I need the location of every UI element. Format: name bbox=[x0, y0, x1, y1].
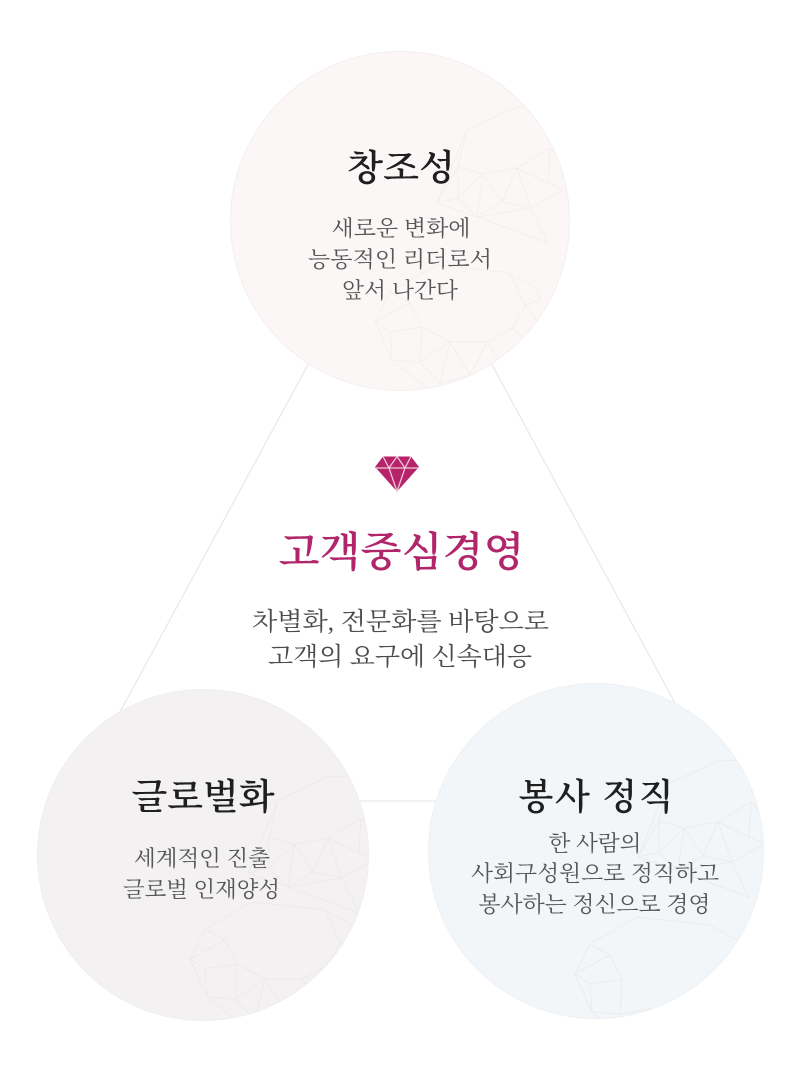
text block: central description: 차별화, 전문화를 바탕으로 bbox=[252, 608, 549, 636]
text block: globalization description: 세계적인 진출 bbox=[134, 846, 270, 871]
text block: central description bbox=[252, 608, 549, 671]
text block: creativity description: 앞서 나간다 bbox=[342, 278, 459, 303]
text block: service and integrity description: 봉사하는 정신으로 경영 bbox=[478, 892, 710, 917]
heading: service and integrity: 봉사 정직 bbox=[518, 777, 674, 817]
text block: creativity description bbox=[308, 216, 492, 303]
text block: service and integrity description: 사회구성원으로 정직하고 bbox=[471, 861, 719, 886]
panel: creativity circle bbox=[230, 52, 570, 390]
text block: creativity description: 새로운 변화에 bbox=[332, 216, 470, 241]
heading: globalization: 글로벌화 bbox=[132, 777, 275, 817]
text block: central description: 고객의 요구에 신속대응 bbox=[268, 643, 532, 671]
text block: service and integrity description: 한 사람의 bbox=[548, 831, 642, 856]
heading: creativity: 창조성 bbox=[347, 148, 455, 188]
text block: globalization description: 글로벌 인재양성 bbox=[123, 877, 280, 902]
panel: service and integrity circle bbox=[428, 684, 771, 1042]
heading: customer-centered management: 고객중심경영 bbox=[278, 529, 524, 575]
text block: creativity description: 능동적인 리더로서 bbox=[308, 247, 492, 272]
connecting triangle lines bbox=[120, 361, 675, 801]
panel: globalization circle bbox=[38, 690, 381, 1027]
text block: service and integrity description bbox=[471, 831, 719, 917]
icon: ruby diamond bbox=[375, 456, 419, 492]
text block: globalization description bbox=[123, 846, 280, 902]
